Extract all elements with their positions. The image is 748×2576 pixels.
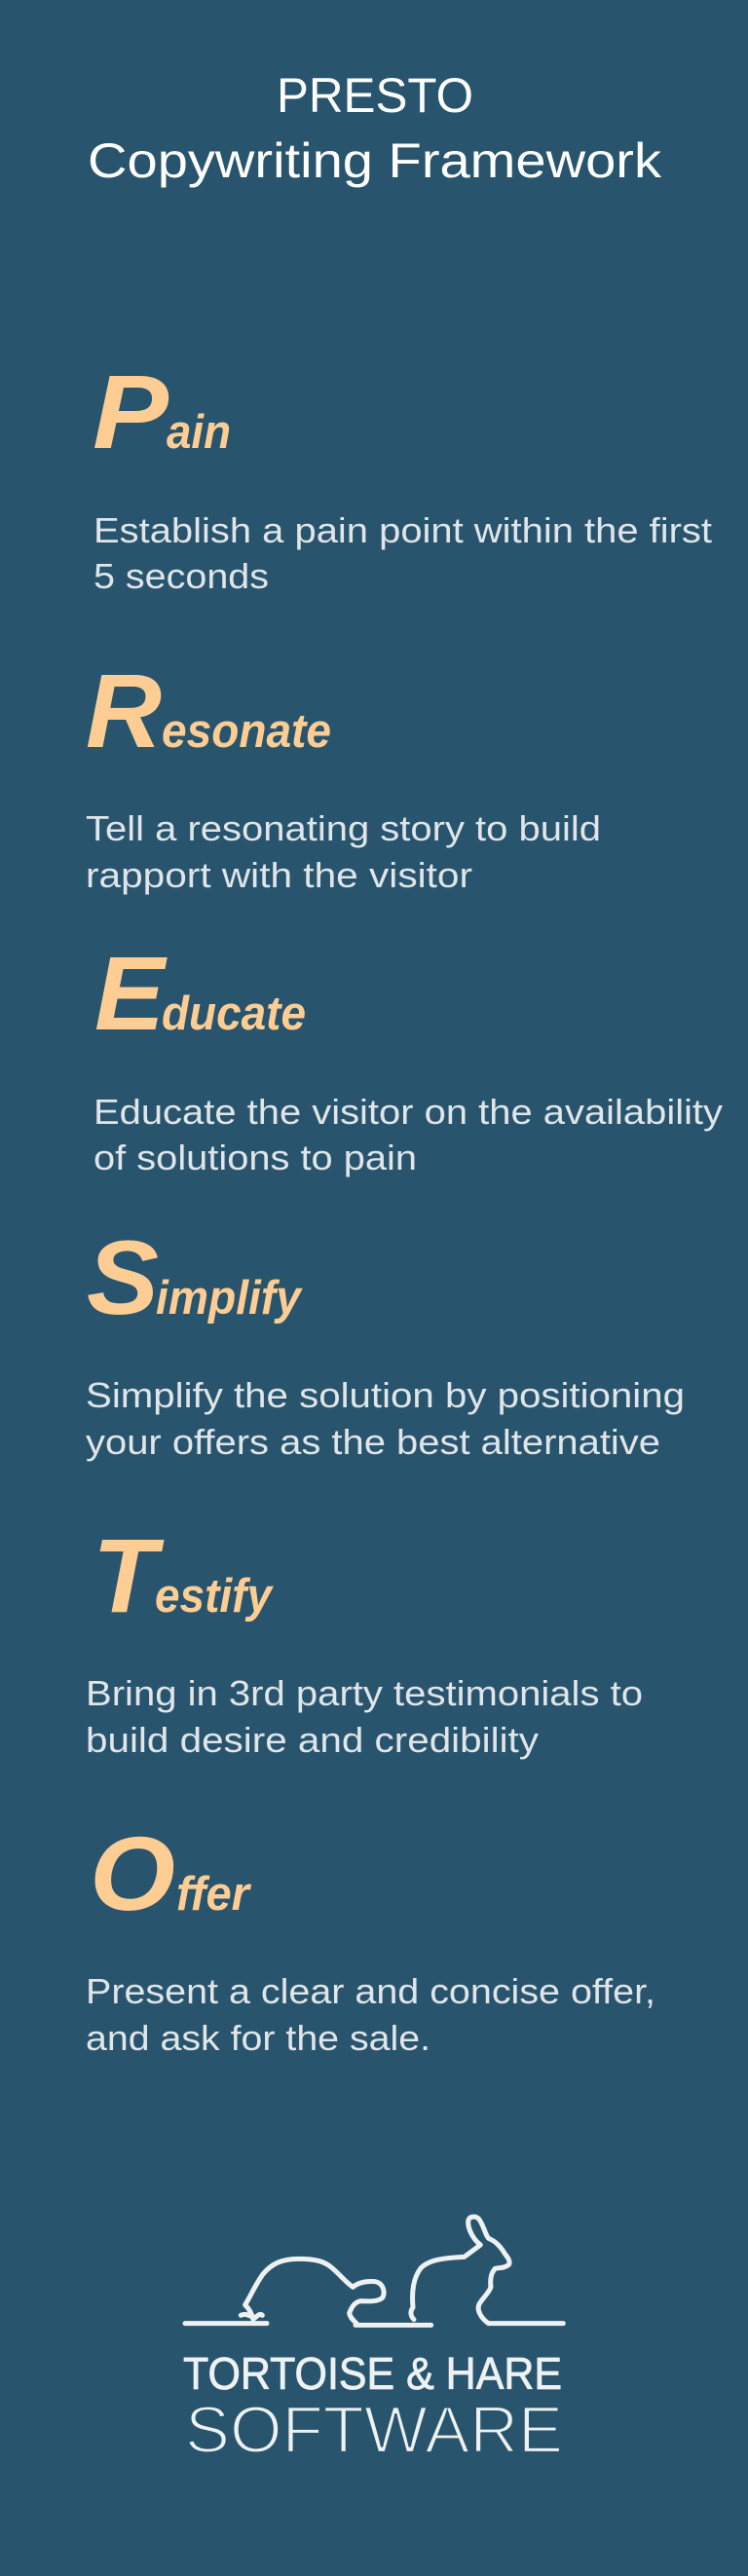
text: Pain description: 5 seconds (94, 556, 269, 596)
panel: Simplify (86, 1218, 685, 1462)
heading: Offer (90, 1814, 252, 1932)
heading: Simplify (87, 1218, 304, 1336)
text: Testify description: Bring in 3rd party testimonials to (86, 1673, 643, 1713)
text: TORTOISE & HARE: TORTOISE & HARE (183, 2348, 562, 2399)
heading: Pain: P (93, 353, 169, 470)
heading: Testify: T (93, 1516, 165, 1634)
text: Pain description (94, 510, 712, 596)
text: Simplify description: Simplify the solution by positioning (86, 1375, 685, 1415)
heading: Simplify: S (87, 1218, 159, 1336)
heading: Educate: ducate (162, 988, 306, 1040)
text: Offer description (86, 1971, 655, 2058)
heading: Pain: ain (167, 406, 231, 459)
heading: Resonate: R (86, 652, 162, 769)
heading: Simplify: implify (156, 1272, 304, 1325)
title: Copywriting Framework (88, 133, 662, 188)
logo: Tortoise & Hare Software (183, 2217, 563, 2467)
text: Offer description: and ask for the sale. (86, 2018, 430, 2058)
panel: Offer (86, 1814, 655, 2058)
text: Educate description: of solutions to pain (94, 1138, 417, 1177)
title (88, 68, 662, 188)
text: Pain description: Establish a pain point within the first (94, 510, 712, 550)
panel: Pain (93, 353, 712, 596)
icon: tortoise and hare line art (185, 2217, 563, 2325)
heading: Offer: O (90, 1814, 175, 1932)
text: Offer description: Present a clear and concise offer, (86, 1971, 655, 2011)
heading: Testify: estify (155, 1570, 275, 1623)
panel: Resonate (86, 652, 601, 895)
text: Resonate description: Tell a resonating story to build (86, 808, 601, 848)
heading: Resonate (86, 652, 331, 769)
heading: Educate (94, 934, 306, 1052)
text: SOFTWARE: SOFTWARE (185, 2393, 563, 2467)
heading: Pain (93, 353, 231, 470)
text: Educate description: Educate the visitor on the availability (94, 1092, 723, 1132)
text: Simplify description: your offers as the best alternative (86, 1422, 660, 1462)
heading: Resonate: esonate (162, 705, 331, 758)
heading: Educate: E (94, 934, 168, 1052)
text: Simplify description (86, 1375, 685, 1462)
panel: Educate (94, 934, 723, 1177)
text: Educate description (94, 1092, 723, 1177)
heading: Offer: ffer (176, 1868, 252, 1921)
text: Resonate description (86, 808, 601, 895)
heading: Testify (93, 1516, 275, 1634)
title: PRESTO (277, 68, 473, 123)
text: Resonate description: rapport with the visitor (86, 855, 472, 895)
panel: Testify (86, 1516, 643, 1760)
text: Testify description: build desire and credibility (86, 1720, 539, 1760)
text: Testify description (86, 1673, 643, 1760)
